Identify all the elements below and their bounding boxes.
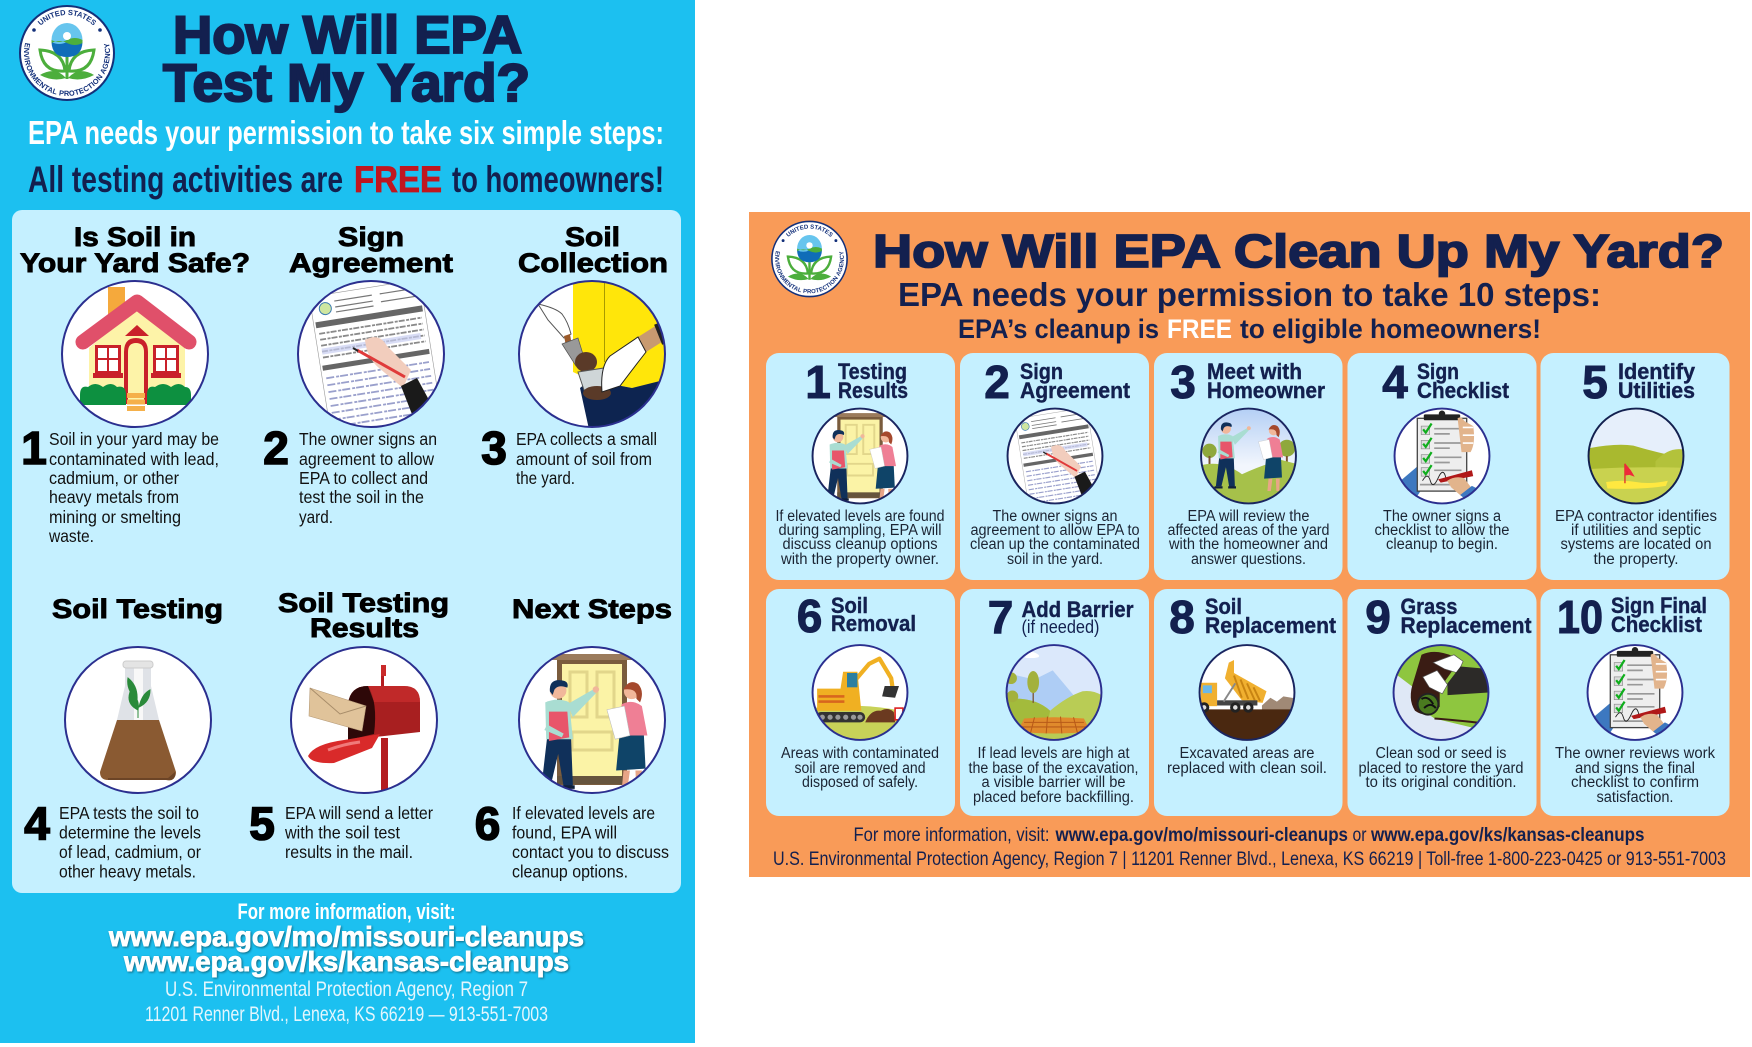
icon: excavator — [813, 645, 907, 740]
text: card 1: during sampling, EPA will — [778, 522, 942, 539]
text: step 4 — [59, 803, 201, 882]
text: card 10: satisfaction. — [1596, 789, 1674, 806]
footer: cleanup poster contact — [773, 824, 1726, 870]
card 3: meet with homeowner — [1154, 353, 1342, 580]
text: step 5: with the soil test — [284, 822, 400, 842]
card 7: add barrier — [960, 589, 1149, 816]
text: card 10: and signs the final — [1575, 760, 1695, 777]
footer: test poster contact: www.epa.gov/mo/missouri-cleanups — [108, 921, 584, 952]
title: How Will EPA Test My Yard: Test My Yard? — [163, 54, 530, 113]
text: card 9: to its original condition. — [1366, 774, 1516, 791]
text: card 8: replaced with clean soil. — [1167, 760, 1327, 777]
text: step 3 — [516, 429, 657, 488]
text: card 5: the property. — [1594, 551, 1678, 568]
card 6: soil removal: Removal — [831, 611, 916, 636]
text: card 3: answer questions. — [1191, 551, 1306, 568]
text: card 3 — [1168, 508, 1330, 568]
card 1: testing results: 1 — [805, 356, 831, 408]
step 5: soil testing results — [249, 588, 449, 862]
card 7: add barrier: 7 — [988, 591, 1013, 643]
text: step 6: contact you to discuss — [512, 842, 669, 862]
text: step 5: results in the mail. — [285, 842, 413, 862]
card 3: meet with homeowner: Homeowner — [1207, 378, 1325, 403]
text: card 3: affected areas of the yard — [1168, 522, 1330, 539]
text: step 1: Soil in your yard may be — [49, 429, 219, 449]
text: card 10: The owner reviews work — [1555, 745, 1715, 762]
text: card 5 — [1555, 508, 1717, 568]
footer: cleanup poster contact: www.epa.gov/ks/kansas-cleanups — [1370, 824, 1645, 846]
icon: barrier in excavation — [1005, 645, 1101, 740]
step 1: is soil safe: Your Yard Safe? — [20, 248, 250, 278]
card 5: identify utilities — [1540, 353, 1730, 580]
card 6: soil removal: 6 — [797, 590, 822, 642]
text: card 6: disposed of safely. — [802, 774, 918, 791]
icon: EPA seal — [20, 6, 114, 100]
icon: dump truck — [1199, 645, 1299, 740]
icon: final clipboard checklist — [1583, 645, 1682, 744]
card 2: sign agreement: Agreement — [1020, 378, 1131, 403]
text: card 5: systems are located on — [1560, 536, 1712, 553]
card 5: identify utilities: Identify — [1618, 359, 1696, 384]
text: step 2: yard. — [299, 507, 333, 527]
card 7: add barrier: (if needed) — [1022, 617, 1100, 637]
title: How Will EPA Test My Yard: How Will EPA — [173, 6, 522, 65]
text: card 1: If elevated levels are found — [776, 508, 944, 525]
subtitle: cleanup is free: FREE — [1167, 314, 1232, 344]
step 4: soil testing: 4 — [24, 798, 50, 850]
text: card 4: checklist to allow the — [1374, 522, 1510, 539]
card 5: identify utilities: 5 — [1582, 356, 1608, 408]
text: step 5 — [284, 803, 433, 862]
step 1: is soil safe: Is Soil in — [74, 222, 196, 252]
text: card 2: agreement to allow EPA to — [970, 522, 1140, 539]
step 4: soil testing — [24, 594, 223, 882]
panel: six testing steps — [12, 210, 681, 893]
step 1: is soil safe — [20, 222, 250, 546]
text: card 4: The owner signs a — [1383, 508, 1501, 525]
text: step 4: determine the levels — [59, 822, 201, 842]
card 9: grass replacement: Replacement — [1400, 613, 1532, 638]
step 3: soil collection: Collection — [518, 248, 668, 278]
text: step 4: of lead, cadmium, or — [59, 842, 201, 862]
step 2: sign agreement: Sign — [338, 222, 404, 252]
card 10: sign final checklist: 10 — [1557, 591, 1603, 643]
icon: sod roll — [1394, 645, 1489, 740]
subtitle: testing is free: All testing activities are — [28, 159, 343, 200]
card 9: grass replacement: 9 — [1365, 591, 1391, 643]
text: step 6: found, EPA will — [512, 822, 617, 842]
text: step 1: heavy metals from — [49, 487, 179, 507]
text: step 1: waste. — [48, 526, 94, 546]
text: card 1: with the property owner. — [780, 551, 939, 568]
subtitle: cleanup is free: to eligible homeowners! — [1240, 314, 1541, 344]
card 4: sign checklist: Checklist — [1417, 378, 1510, 403]
subtitle: ten steps: EPA needs your permission to take 10 steps: — [898, 276, 1601, 313]
step 2: sign agreement: 2 — [263, 422, 289, 474]
text: step 2: test the soil in the — [299, 487, 424, 507]
subtitle: cleanup is free — [958, 314, 1541, 344]
panel: test my yard poster background — [0, 0, 695, 1043]
step 3: soil collection: Soil — [565, 222, 620, 252]
icon: door meeting — [813, 409, 907, 503]
text: card 5: EPA contractor identifies — [1555, 508, 1717, 525]
text: card 2 — [970, 508, 1140, 568]
title: How Will EPA Clean Up My Yard: How Will EPA Clean Up My Yard? — [873, 225, 1724, 277]
icon: mailbox — [291, 647, 437, 794]
text: card 2: clean up the contaminated — [970, 536, 1140, 553]
card 10: sign final checklist — [1540, 589, 1730, 816]
footer: test poster contact: 11201 Renner Blvd., Lenexa, KS 66219 — 913-551-7003 — [145, 1003, 548, 1026]
step 5: soil testing results: 5 — [249, 798, 275, 850]
text: card 10 — [1555, 745, 1715, 806]
step 2: sign agreement: Agreement — [289, 248, 453, 278]
text: card 9: placed to restore the yard — [1358, 760, 1524, 777]
footer: test poster contact — [108, 899, 584, 1026]
subtitle: testing is free: FREE — [354, 159, 442, 200]
icon: flask of soil — [65, 647, 211, 793]
icon: meeting in yard — [1201, 409, 1296, 503]
text: card 1: discuss cleanup options — [782, 536, 938, 553]
text: step 1 — [48, 429, 219, 546]
subtitle: testing is free — [28, 159, 664, 200]
icon: meeting at door — [519, 647, 665, 793]
text: step 2: agreement to allow — [299, 449, 434, 469]
card 8: soil replacement: Replacement — [1205, 613, 1337, 638]
footer: cleanup poster contact: For more information, visit: — [854, 824, 1050, 846]
text: card 3: with the homeowner and — [1168, 536, 1328, 553]
step 5: soil testing results: Soil Testing — [278, 588, 449, 618]
text: step 1: mining or smelting — [49, 507, 181, 527]
footer: cleanup poster contact: or — [1352, 824, 1367, 846]
card 6: soil removal — [766, 589, 955, 816]
icon: EPA seal small — [772, 221, 847, 297]
card 9: grass replacement — [1348, 589, 1536, 816]
footer: cleanup poster contact: www.epa.gov/mo/missouri-cleanups — [1055, 824, 1348, 846]
text: step 5: EPA will send a letter — [285, 803, 433, 823]
text: card 10: checklist to confirm — [1571, 774, 1699, 791]
card 7: add barrier: Add Barrier — [1022, 597, 1134, 622]
subtitle: testing is free: to homeowners! — [452, 159, 664, 200]
text: card 3: EPA will review the — [1188, 508, 1310, 525]
card 4: sign checklist: Sign — [1417, 359, 1459, 384]
card 8: soil replacement: Soil — [1205, 594, 1242, 619]
panel: clean up my yard poster background — [749, 212, 1750, 877]
text: card 6: Areas with contaminated — [781, 745, 939, 762]
card 1: testing results — [766, 353, 955, 580]
step 6: next steps: Next Steps — [512, 594, 672, 624]
card 6: soil removal: Soil — [831, 593, 868, 618]
step 6: next steps — [475, 594, 672, 882]
icon: clipboard checklist — [1390, 409, 1489, 508]
text: card 8: Excavated areas are — [1180, 745, 1314, 762]
text: step 4: EPA tests the soil to — [59, 803, 199, 823]
text: card 1 — [776, 508, 944, 568]
step 3: soil collection — [481, 222, 672, 488]
text: step 2: EPA to collect and — [299, 468, 428, 488]
card 3: meet with homeowner: Meet with — [1207, 359, 1302, 384]
text: card 7: a visible barrier will be — [982, 774, 1126, 791]
card 3: meet with homeowner: 3 — [1170, 356, 1196, 408]
text: card 5: if utilities and septic — [1571, 522, 1701, 539]
icon: signed form — [298, 279, 444, 435]
text: step 4: other heavy metals. — [59, 862, 196, 882]
card 2: sign agreement: Sign — [1020, 359, 1063, 384]
step 5: soil testing results: Results — [310, 613, 419, 643]
text: card 4: cleanup to begin. — [1386, 536, 1498, 553]
text: card 7 — [968, 745, 1138, 806]
step 6: next steps: 6 — [475, 798, 500, 850]
subtitle: cleanup is free: EPA’s cleanup is — [958, 314, 1159, 344]
text: step 3: EPA collects a small — [516, 429, 657, 449]
text: step 2 — [299, 429, 437, 527]
footer: test poster contact: www.epa.gov/ks/kansas-cleanups — [123, 946, 569, 977]
step 2: sign agreement — [263, 222, 453, 527]
card 10: sign final checklist: Checklist — [1611, 612, 1703, 637]
icon: house — [62, 281, 208, 427]
text: step 1: cadmium, or other — [49, 468, 179, 488]
icon: soil collection — [519, 279, 672, 434]
icon: signed form — [1008, 408, 1102, 509]
text: card 4 — [1374, 508, 1510, 553]
text: step 3: amount of soil from — [516, 449, 652, 469]
text: card 9 — [1358, 745, 1524, 791]
text: card 7: If lead levels are high at — [978, 745, 1130, 762]
step 1: is soil safe: 1 — [21, 422, 47, 474]
text: step 6: If elevated levels are — [512, 803, 655, 823]
text: card 8 — [1167, 745, 1327, 777]
text: step 3: the yard. — [516, 468, 575, 488]
text: card 9: Clean sod or seed is — [1376, 745, 1507, 762]
step 3: soil collection: 3 — [481, 422, 507, 474]
icon: yard with flag — [1589, 409, 1683, 503]
card 1: testing results: Testing — [838, 359, 907, 384]
title: How Will EPA Test My Yard — [163, 6, 530, 113]
card 10: sign final checklist: Sign Final — [1611, 593, 1707, 618]
card 5: identify utilities: Utilities — [1618, 378, 1695, 403]
card 1: testing results: Results — [838, 378, 908, 403]
text: card 6: soil are removed and — [794, 760, 926, 777]
text: card 7: placed before backfilling. — [973, 789, 1134, 806]
text: card 2: The owner signs an — [992, 508, 1118, 525]
text: card 7: the base of the excavation, — [968, 760, 1138, 777]
card 8: soil replacement: 8 — [1169, 591, 1195, 643]
text: step 2: The owner signs an — [299, 429, 437, 449]
card 4: sign checklist: 4 — [1382, 356, 1408, 408]
footer: test poster contact: For more information, visit: — [238, 899, 456, 924]
footer: test poster contact: U.S. Environmental Protection Agency, Region 7 — [165, 978, 528, 1001]
text: step 6 — [512, 803, 669, 882]
text: card 6 — [781, 745, 939, 791]
step 4: soil testing: Soil Testing — [52, 594, 223, 624]
card 9: grass replacement: Grass — [1400, 594, 1458, 619]
card 2: sign agreement — [960, 353, 1149, 580]
card 4: sign checklist — [1348, 353, 1536, 580]
text: step 1: contaminated with lead, — [49, 449, 219, 469]
text: step 6: cleanup options. — [512, 862, 628, 882]
card 2: sign agreement: 2 — [984, 356, 1010, 408]
card 8: soil replacement — [1154, 589, 1342, 816]
subtitle: permission: EPA needs your permission to take six simple steps: — [28, 114, 664, 151]
text: card 2: soil in the yard. — [1007, 551, 1103, 568]
